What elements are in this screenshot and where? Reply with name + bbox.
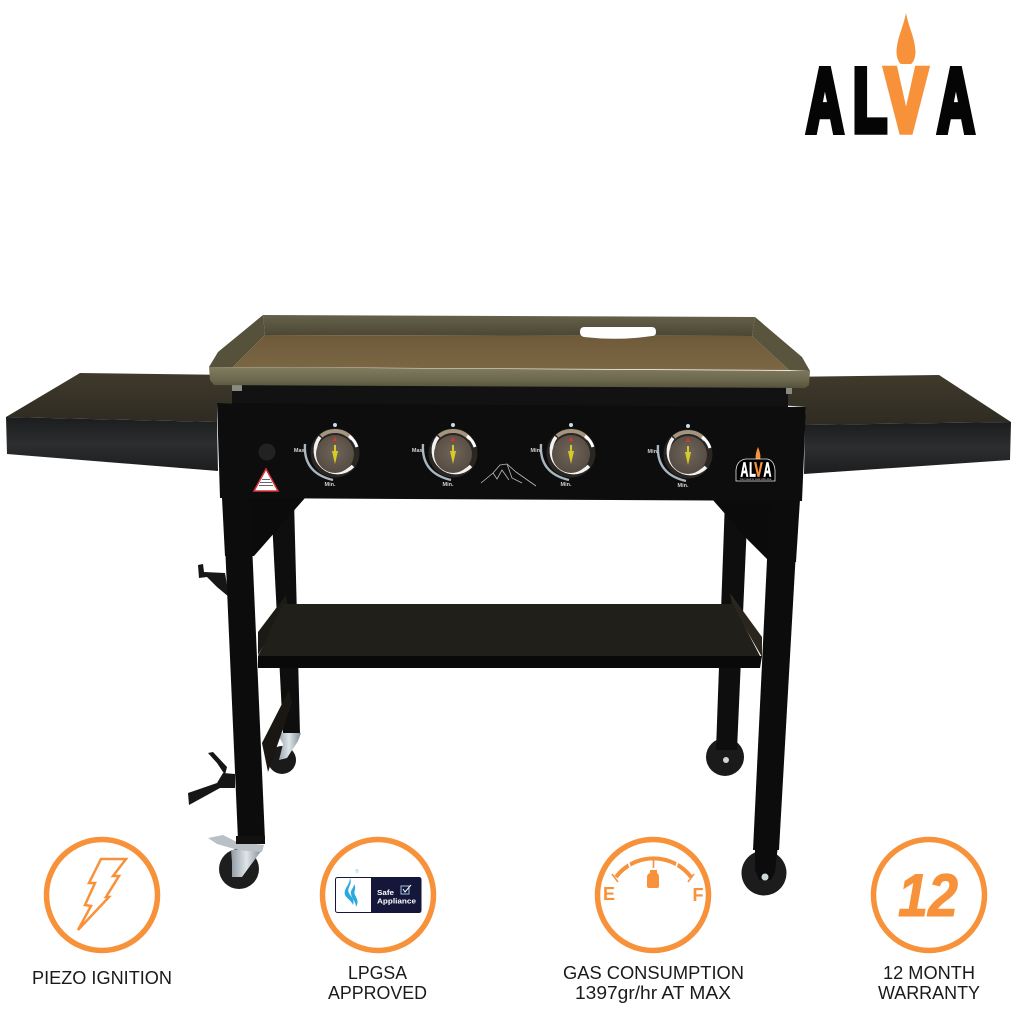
panel logo badge: A bbox=[764, 459, 772, 481]
griddle cooking surface bbox=[233, 335, 789, 370]
panel logo badge: A bbox=[741, 459, 749, 481]
control panel bbox=[217, 403, 806, 501]
knob 1: Max. bbox=[294, 448, 307, 454]
icon: fuel gauge: E bbox=[603, 884, 615, 904]
logo wordmark: V bbox=[885, 51, 927, 151]
logo wordmark: A bbox=[807, 51, 843, 151]
griddle back wall bbox=[263, 315, 755, 336]
knob 4: Min. bbox=[648, 449, 659, 455]
gas bottle bbox=[647, 870, 659, 888]
ignition button bbox=[258, 444, 276, 460]
icon: blue flame bbox=[345, 878, 358, 907]
panel logo badge: L bbox=[749, 459, 756, 481]
griddle top bbox=[209, 315, 810, 388]
label: PIEZO IGNITION bbox=[32, 967, 172, 988]
feature: gas consumption: 1397gr/hr AT MAX bbox=[575, 982, 731, 1003]
panel logo badge bbox=[736, 447, 775, 481]
left bracket bbox=[222, 498, 305, 556]
logo wordmark: L bbox=[853, 50, 887, 150]
safe appliance badge bbox=[336, 868, 421, 913]
front right leg bbox=[753, 498, 799, 850]
left side shelf bbox=[6, 373, 236, 471]
griddle front rim bbox=[209, 367, 810, 388]
feature: LPGSA approved bbox=[322, 840, 434, 1003]
safe appliance badge: Appliance bbox=[377, 896, 416, 906]
griddle right wall bbox=[752, 317, 810, 371]
right side shelf bbox=[778, 375, 1011, 474]
ring bbox=[874, 840, 984, 950]
knob 4 bbox=[648, 424, 712, 489]
brand logo: ALVA bbox=[807, 13, 974, 151]
side hook bbox=[198, 564, 229, 597]
panel logo badge: Your need to cook with Alva bbox=[740, 477, 772, 481]
warning triangle sticker bbox=[254, 469, 278, 491]
knob 1 bbox=[294, 423, 360, 488]
mountain emblem bbox=[481, 464, 536, 486]
knob 1: Min. bbox=[324, 482, 336, 488]
feature: gas consumption bbox=[563, 840, 744, 1003]
ring bbox=[598, 840, 708, 950]
ring bbox=[46, 840, 158, 950]
right bracket bbox=[712, 499, 800, 562]
lever handle bbox=[188, 752, 235, 805]
ring bbox=[322, 840, 434, 950]
knob 3: Min. bbox=[560, 482, 572, 488]
label: GAS CONSUMPTION bbox=[563, 962, 744, 983]
icon: fuel gauge: F bbox=[692, 885, 704, 905]
label: LPGSA bbox=[348, 962, 408, 983]
panel logo badge: V bbox=[754, 459, 763, 481]
knob 2 bbox=[412, 423, 478, 488]
feature: piezo ignition bbox=[32, 840, 172, 988]
front right wheel bbox=[742, 845, 786, 896]
logo wordmark: A bbox=[938, 51, 974, 151]
knob 3: Min. bbox=[530, 448, 542, 454]
knob 2: Max. bbox=[412, 448, 425, 454]
rear right leg and wheel bbox=[706, 500, 748, 776]
knob 3 bbox=[530, 423, 596, 488]
label: 12 MONTH bbox=[883, 962, 975, 983]
front left caster bbox=[208, 835, 265, 889]
knob 4: Min. bbox=[678, 483, 689, 489]
icon: fuel gauge bbox=[603, 857, 704, 905]
grease cut-out bbox=[580, 327, 656, 339]
griddle left wall bbox=[209, 315, 265, 367]
lower storage shelf bbox=[258, 593, 762, 668]
feature: 12 month warranty: WARRANTY bbox=[878, 982, 980, 1003]
safe appliance badge: ® bbox=[355, 868, 359, 875]
feature: LPGSA approved: APPROVED bbox=[328, 982, 427, 1003]
icon: number 12: 12 bbox=[898, 862, 958, 929]
feature: 12 month warranty bbox=[874, 840, 984, 1003]
griddle underside band bbox=[232, 384, 792, 408]
knob 2: Min. bbox=[442, 482, 454, 488]
product photo: griddle on cart bbox=[6, 315, 1011, 896]
logo flame bbox=[896, 13, 916, 64]
icon: lightning bolt bbox=[78, 859, 126, 930]
safe appliance badge: Safe bbox=[377, 888, 394, 897]
front left leg bbox=[223, 498, 265, 840]
rear left leg and caster bbox=[262, 500, 301, 774]
logo wordmark bbox=[807, 50, 974, 151]
